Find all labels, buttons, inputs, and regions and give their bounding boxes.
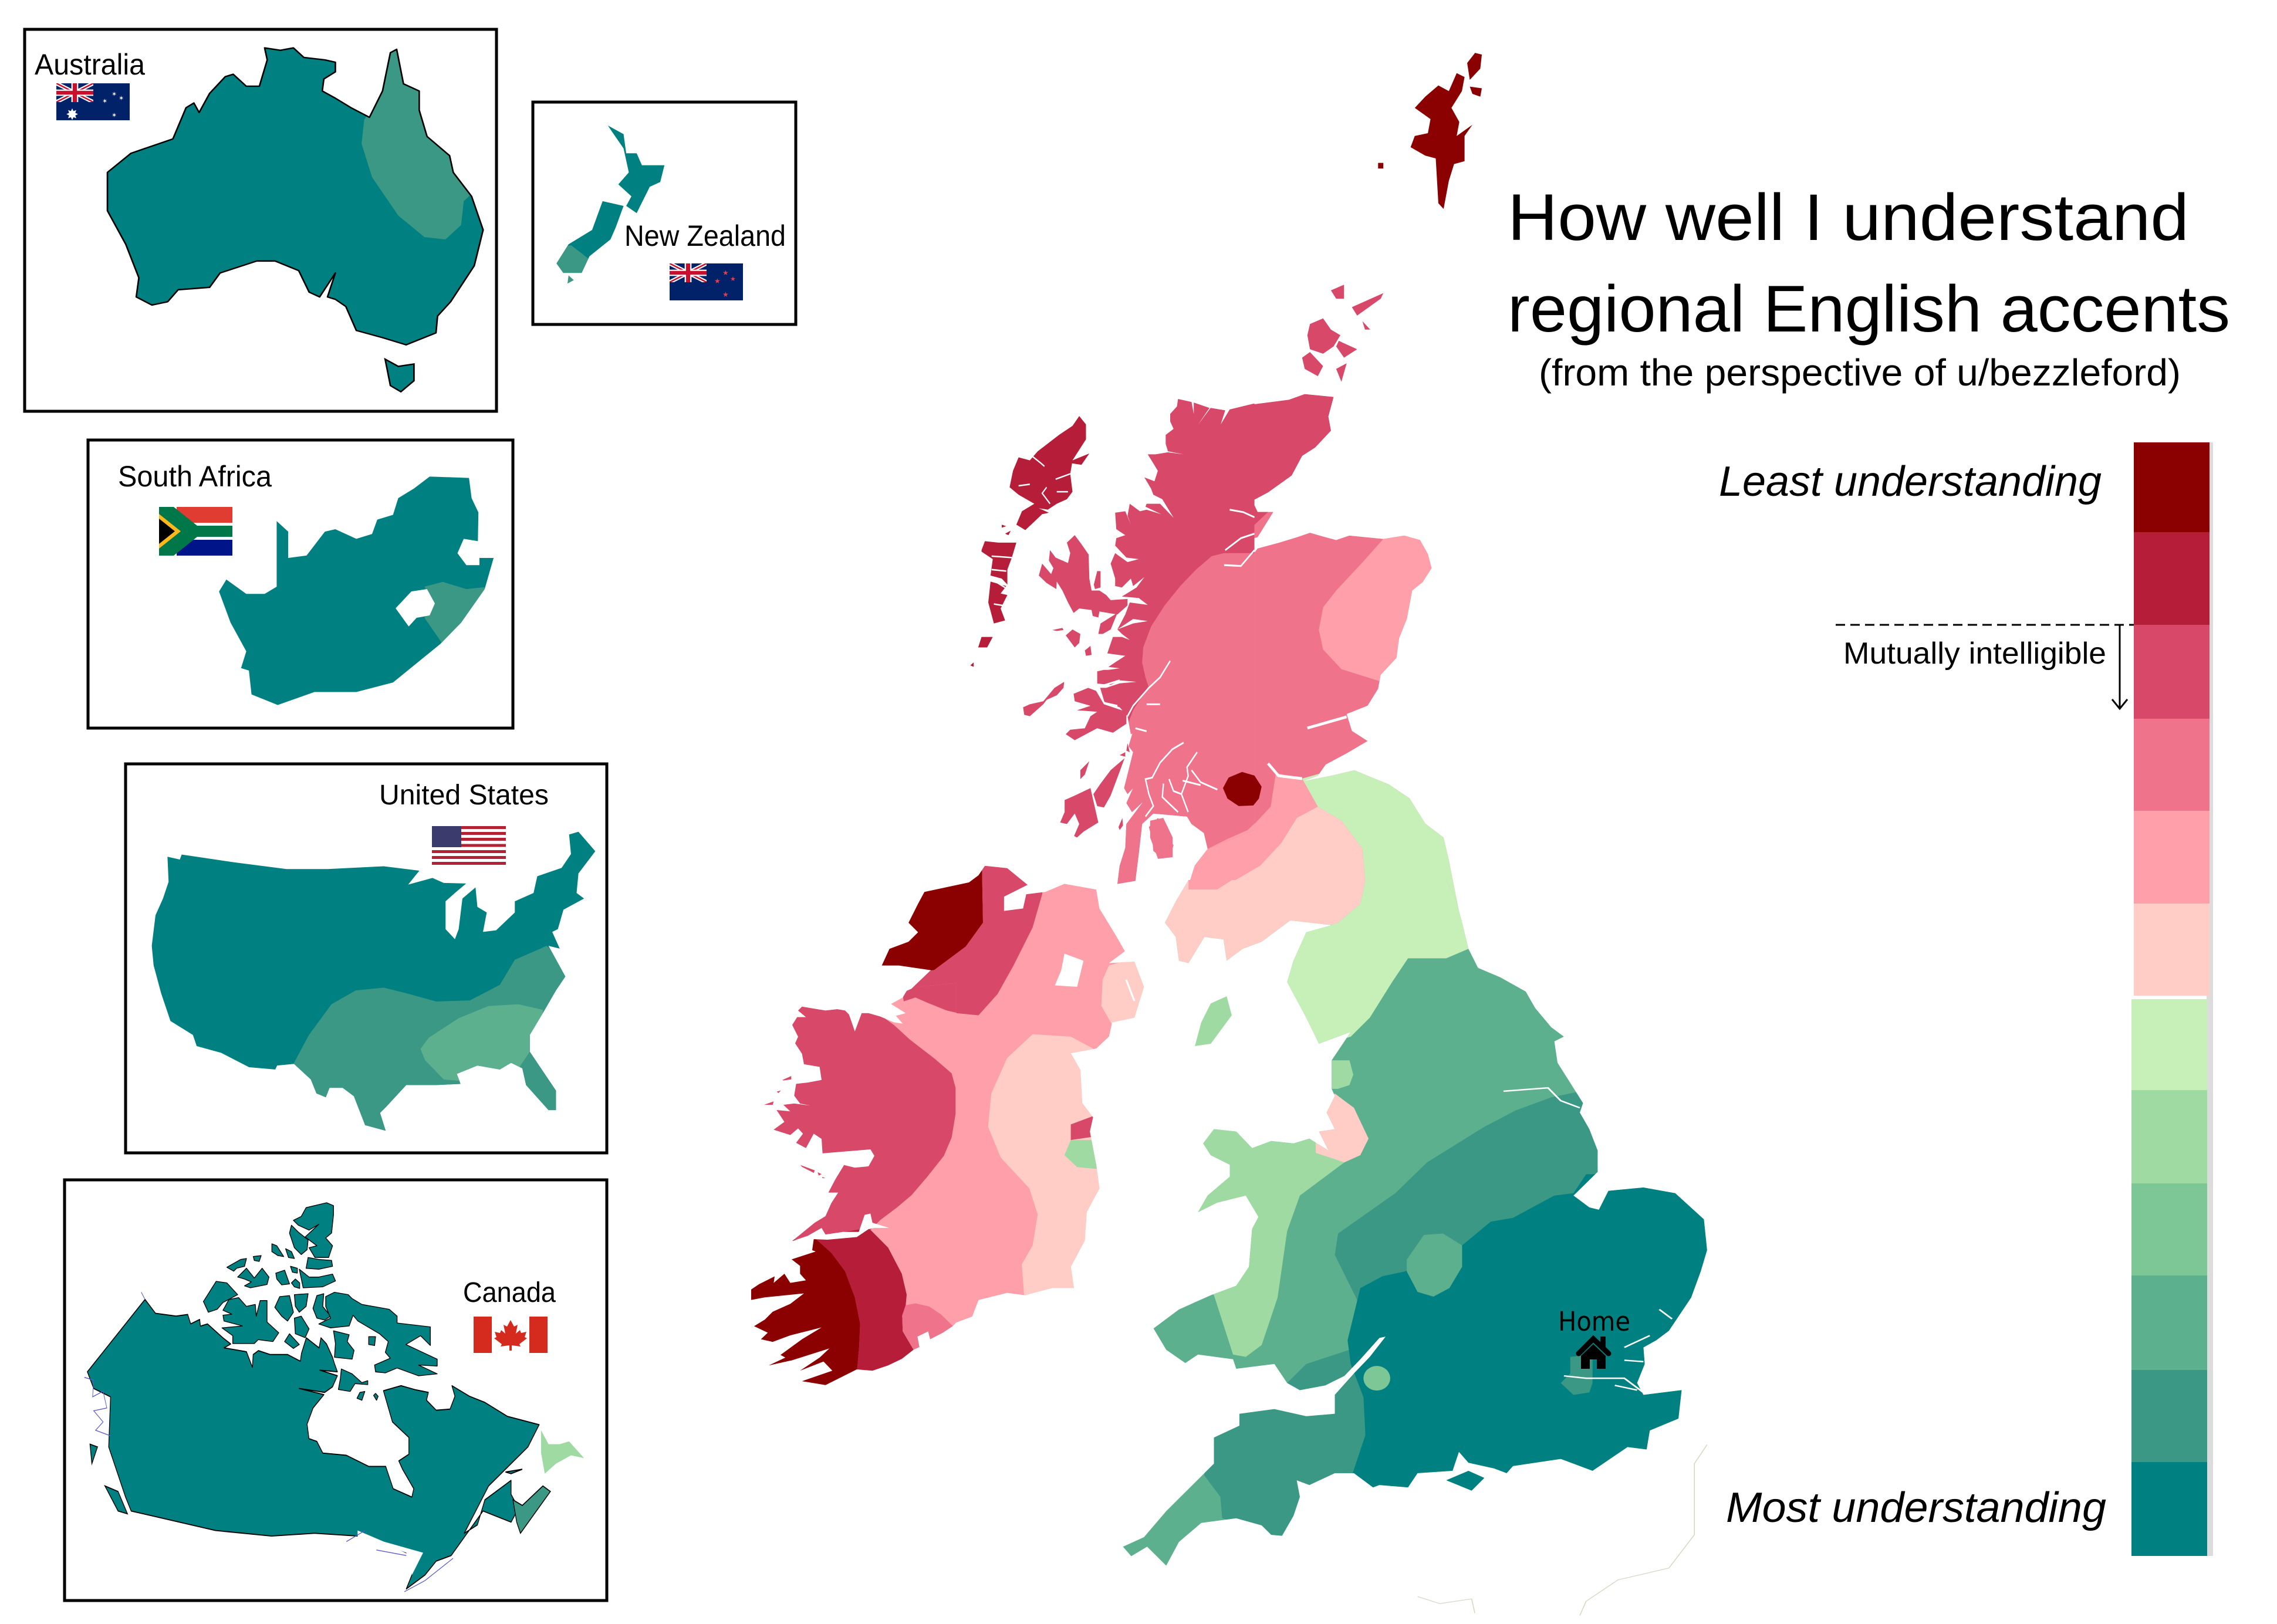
flag: South Africa (159, 507, 232, 556)
legend label: least understanding: Least understanding (1719, 458, 2102, 505)
Orkney (1302, 285, 1383, 382)
label: South Africa: South Africa (118, 460, 272, 493)
flag: Australia: ✶ (102, 98, 107, 105)
label: Canada: Canada (463, 1277, 556, 1308)
region: England and Wales (1116, 875, 1752, 1615)
region: Scotland west and Hebrides (971, 399, 1262, 884)
flag: Canada (474, 1317, 548, 1353)
map: South Africa (219, 476, 494, 705)
Isle of Man (1195, 996, 1232, 1046)
label: United States: United States (379, 780, 549, 811)
flag: Australia: ✶ (119, 95, 124, 102)
arrow: mutually intelligible (2112, 625, 2127, 709)
flag: New Zealand: ★ (722, 269, 729, 277)
Gigha (1119, 818, 1123, 830)
Outer Hebrides (970, 416, 1089, 667)
flag: Australia (56, 83, 130, 123)
panel: Canada (65, 1180, 607, 1601)
subtitle: (from the perspective of u/bezzleford) (1539, 351, 2181, 394)
title: How well I understand (1508, 181, 2189, 254)
flag: United States (432, 826, 506, 865)
flag: Australia: ✶ (112, 91, 117, 98)
title: regional English accents (1508, 272, 2230, 346)
flag: New Zealand: ★ (722, 290, 729, 299)
label: Home: Home (1558, 1306, 1630, 1337)
map: New Zealand (545, 126, 664, 283)
Arran (1150, 818, 1173, 859)
region: Ireland (881, 866, 1144, 1322)
icon: house (1579, 1337, 1609, 1369)
panel: United States (126, 764, 607, 1153)
Glasgow blob (1223, 772, 1262, 806)
panel: Australia (23, 28, 498, 413)
map: Australia (107, 47, 484, 393)
label: mutually intelligible: Mutually intelligible (1843, 637, 2106, 671)
Bute (1149, 818, 1174, 858)
Isle of Wight (1446, 1471, 1484, 1491)
France coast trace (1418, 1444, 1707, 1615)
region: west Ireland (751, 983, 957, 1385)
legend: colour scale (2131, 442, 2213, 1556)
flag: Australia: ✶ (112, 112, 117, 119)
Lough Neagh (1055, 953, 1083, 987)
Scottish mainland east colours (1190, 394, 1459, 911)
flag: Australia: ✸ (66, 106, 79, 123)
map: Canada (85, 1203, 584, 1592)
threshold line (1836, 624, 2134, 625)
title (1508, 181, 2230, 346)
flag: New Zealand: ★ (714, 277, 721, 285)
region: Scotland north and east (1090, 53, 1482, 916)
flag: New Zealand (670, 263, 743, 300)
flag: New Zealand: ★ (730, 276, 736, 283)
Scottish mainland west colours (1097, 399, 1255, 884)
Aran and western islets (764, 1076, 826, 1178)
Arctic islands (204, 1203, 437, 1400)
map: United States (144, 823, 601, 1141)
Shetland (1378, 53, 1482, 209)
label: New Zealand: New Zealand (624, 219, 786, 252)
panel: South Africa (88, 440, 513, 728)
legend label: most understanding: Most understanding (1726, 1484, 2106, 1531)
map: British Isles (734, 53, 1752, 1615)
label: Australia: Australia (35, 48, 145, 81)
Skye and Inner Hebrides (1023, 535, 1130, 837)
panel: New Zealand (533, 102, 796, 324)
